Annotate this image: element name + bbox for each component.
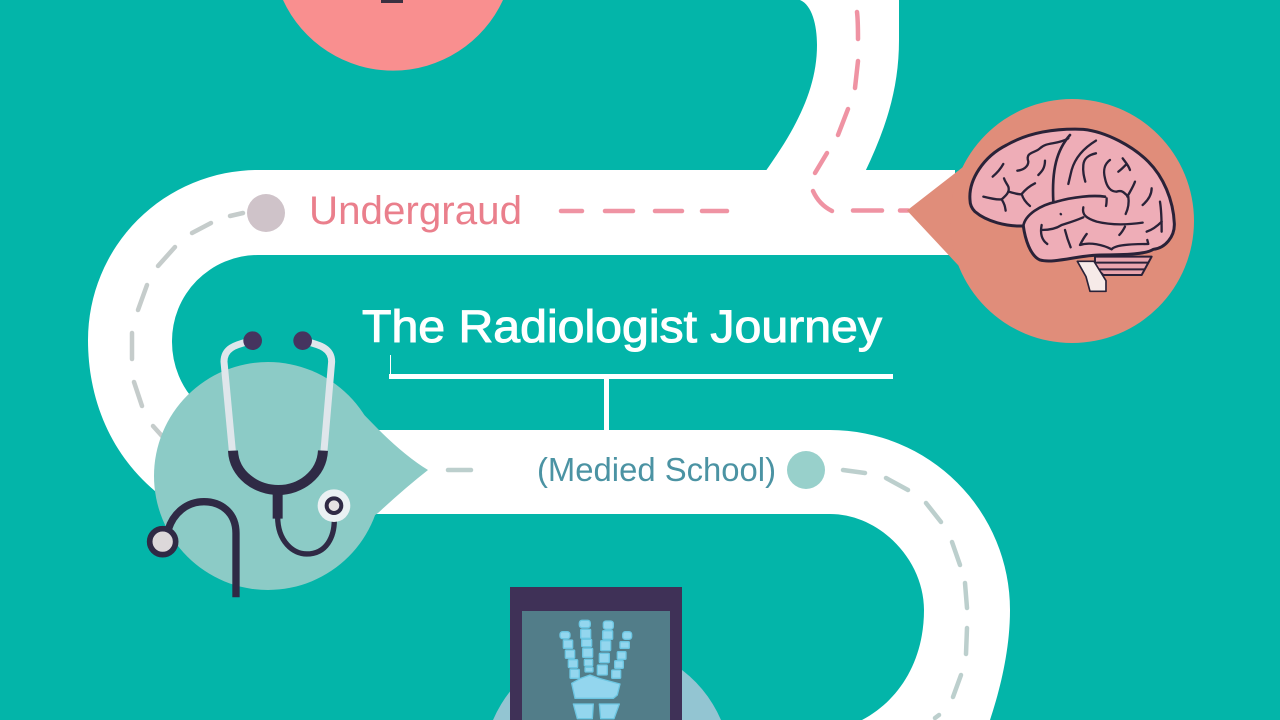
label: Undergraud: Undergraud: [309, 189, 522, 233]
pink circle cropped at top: [283, 0, 503, 71]
icon: brain: [970, 129, 1174, 291]
brain marker: [907, 99, 1194, 343]
pink road dashes: [561, 12, 908, 211]
icon: stethoscope: [150, 331, 350, 597]
title bracket connector: [389, 355, 893, 431]
icon: x-ray hand: [560, 620, 632, 719]
label: Medical school: (Medied School): [537, 451, 776, 488]
grey road dashes: [132, 213, 243, 436]
stethoscope marker: [150, 331, 428, 597]
teal-grey road dashes: [448, 470, 967, 718]
brain stem: [1077, 261, 1106, 291]
title: The Radiologist Journey: [362, 301, 883, 352]
cerebellum: [1095, 257, 1152, 275]
winding white road: [88, 0, 1010, 720]
x-ray marker: [493, 587, 721, 720]
